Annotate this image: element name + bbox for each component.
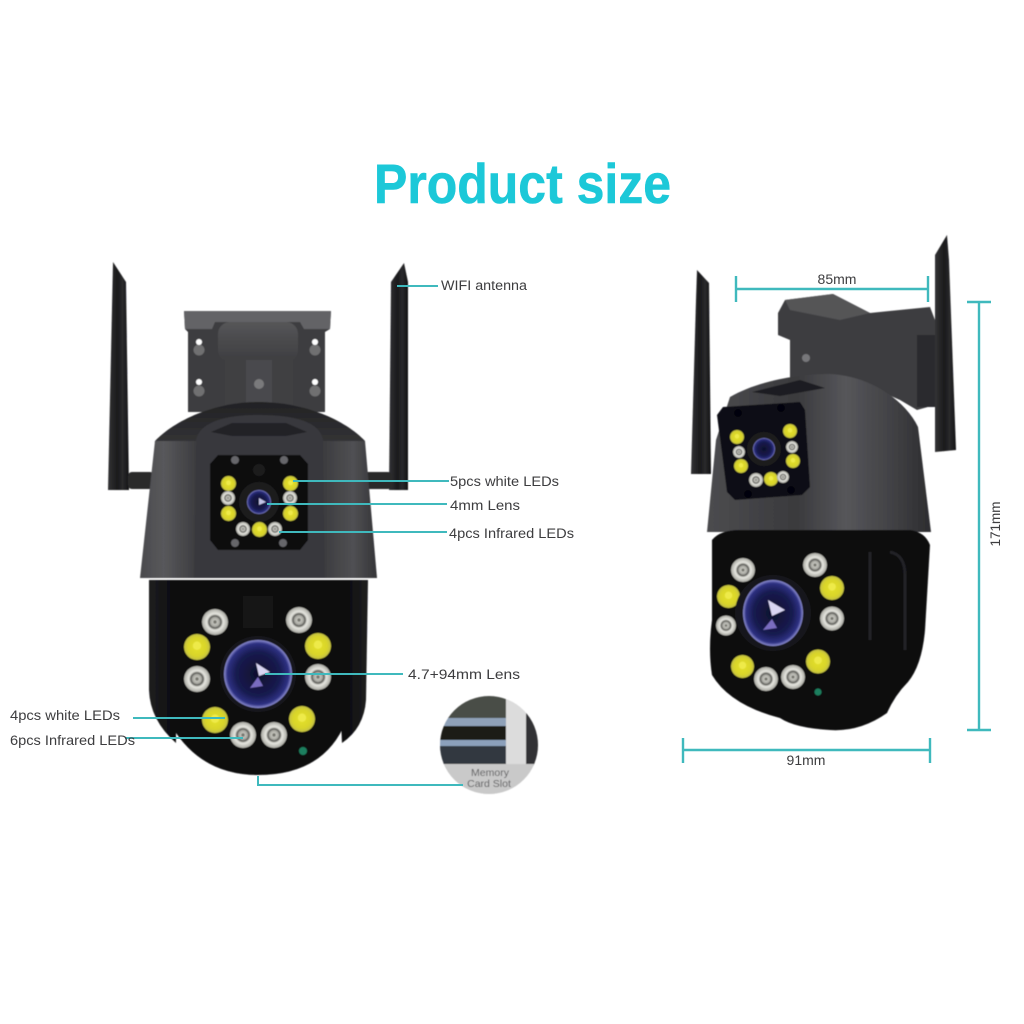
callout: 5pcs white LEDs: 5pcs white LEDs <box>450 473 559 489</box>
main LEDs <box>184 607 331 748</box>
main lens <box>220 636 296 712</box>
dimension: 171mm height <box>967 302 1003 730</box>
callout: 4.7+94mm lens: 4.7+94mm Lens <box>408 666 520 682</box>
face gap <box>243 596 273 628</box>
antenna joints <box>128 472 392 489</box>
callout: memory card slot inset <box>440 696 540 794</box>
lower housing side <box>710 530 930 730</box>
main LEDs side <box>716 553 844 691</box>
icon: left antenna <box>108 262 129 490</box>
panel: side view camera <box>691 235 956 730</box>
dimension: 85mm width <box>736 271 928 302</box>
callout: WIFI antenna <box>397 278 528 293</box>
panel: front view camera <box>108 262 408 775</box>
status indicator side <box>814 688 822 696</box>
dimension: 85mm width: 85mm <box>818 271 856 287</box>
small camera plate <box>210 455 308 550</box>
dimension: 171mm height: 171mm <box>988 501 1003 547</box>
main lens side <box>735 575 811 651</box>
dimension: 91mm width: 91mm <box>787 752 825 768</box>
upper body side <box>707 374 931 532</box>
callout: 4pcs infrared LEDs: 4pcs Infrared LEDs <box>449 525 574 541</box>
title: Product size <box>374 152 671 215</box>
upper body <box>140 402 377 578</box>
mounting bracket <box>184 311 331 412</box>
dimension: 91mm width <box>683 738 930 768</box>
callout line: memory slot <box>258 776 463 785</box>
housing highlights <box>870 552 905 650</box>
wall bracket <box>778 294 935 410</box>
small camera plate side <box>717 402 810 500</box>
icon: left antenna side <box>691 270 711 474</box>
camera face <box>176 587 343 775</box>
icon: right antenna side <box>935 235 956 452</box>
callout: 4mm lens: 4mm Lens <box>450 497 520 513</box>
label: memory card slot: Memory <box>471 767 510 779</box>
callout: WIFI antenna: WIFI antenna <box>441 278 528 293</box>
status indicator <box>299 747 307 755</box>
callout: 6pcs infrared LEDs: 6pcs Infrared LEDs <box>10 732 135 748</box>
label: card slot: Card Slot <box>467 778 511 790</box>
callout: 4pcs white LEDs: 4pcs white LEDs <box>10 707 120 723</box>
lower black housing <box>149 580 368 743</box>
icon: right antenna <box>389 263 408 490</box>
